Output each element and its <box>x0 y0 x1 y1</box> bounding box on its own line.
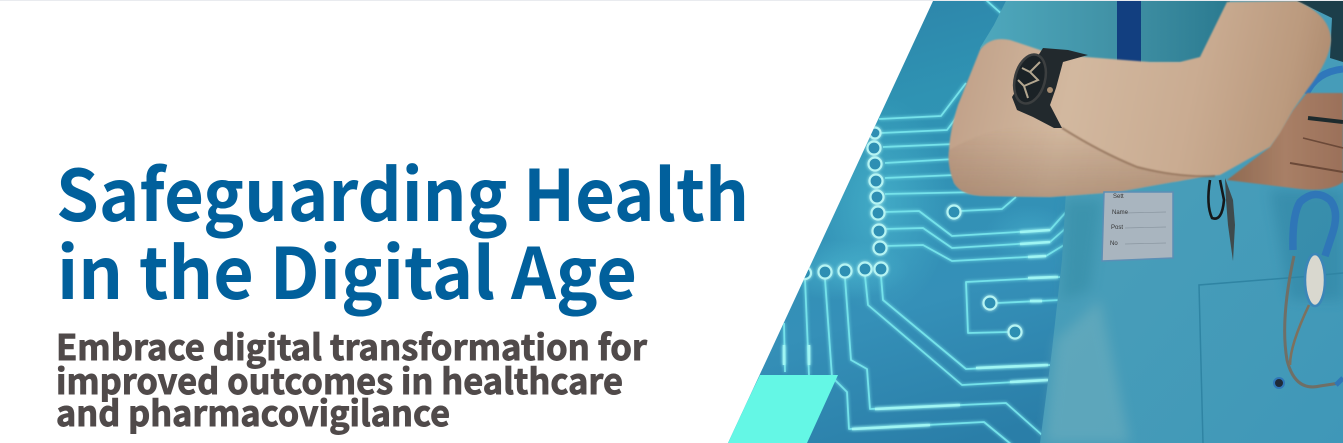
lanyard <box>1117 1 1141 63</box>
image panel: nurse and circuit background <box>720 0 1343 443</box>
nurse: finger gaps <box>1290 118 1343 172</box>
nurse: lower forearm shading <box>948 144 1196 198</box>
subtitle: improved outcomes in healthcare <box>56 354 623 405</box>
name badge: Post <box>1111 225 1123 231</box>
nurse: scrub top <box>980 1 1343 443</box>
title: Safeguarding Health <box>56 140 749 242</box>
circuit background <box>728 1 1066 443</box>
stethoscope <box>1274 194 1343 388</box>
title: in the Digital Age <box>57 218 637 320</box>
name badge: Name <box>1112 210 1129 216</box>
name badge: No <box>1110 241 1118 247</box>
name badge: Sett <box>1113 194 1124 200</box>
subtitle: and pharmacovigilance <box>56 386 450 437</box>
background glow <box>808 136 1053 293</box>
nurse: dark sleeve at right <box>1297 1 1343 62</box>
bright trace highlights <box>784 230 1058 429</box>
subtitle: Embrace digital transformation for <box>56 320 648 371</box>
subtitle <box>56 320 648 437</box>
nurse: crossed arms <box>949 1 1331 197</box>
top border line <box>0 0 1343 1</box>
stethoscope tubing behind arm <box>1306 69 1343 94</box>
accent parallelogram <box>727 375 838 443</box>
title <box>56 140 749 320</box>
wristwatch <box>1009 48 1088 128</box>
nurse: upper scrub shading <box>980 1 1230 62</box>
scissors <box>1208 178 1235 261</box>
nurse: arm crease <box>1062 128 1215 176</box>
nurse: hand <box>1227 93 1343 190</box>
nurse: scrub shadow folds <box>1045 190 1343 443</box>
pocket <box>1199 273 1343 443</box>
circuit nodes <box>799 128 1022 338</box>
circuit traces <box>784 0 1066 443</box>
name badge <box>1102 192 1173 261</box>
